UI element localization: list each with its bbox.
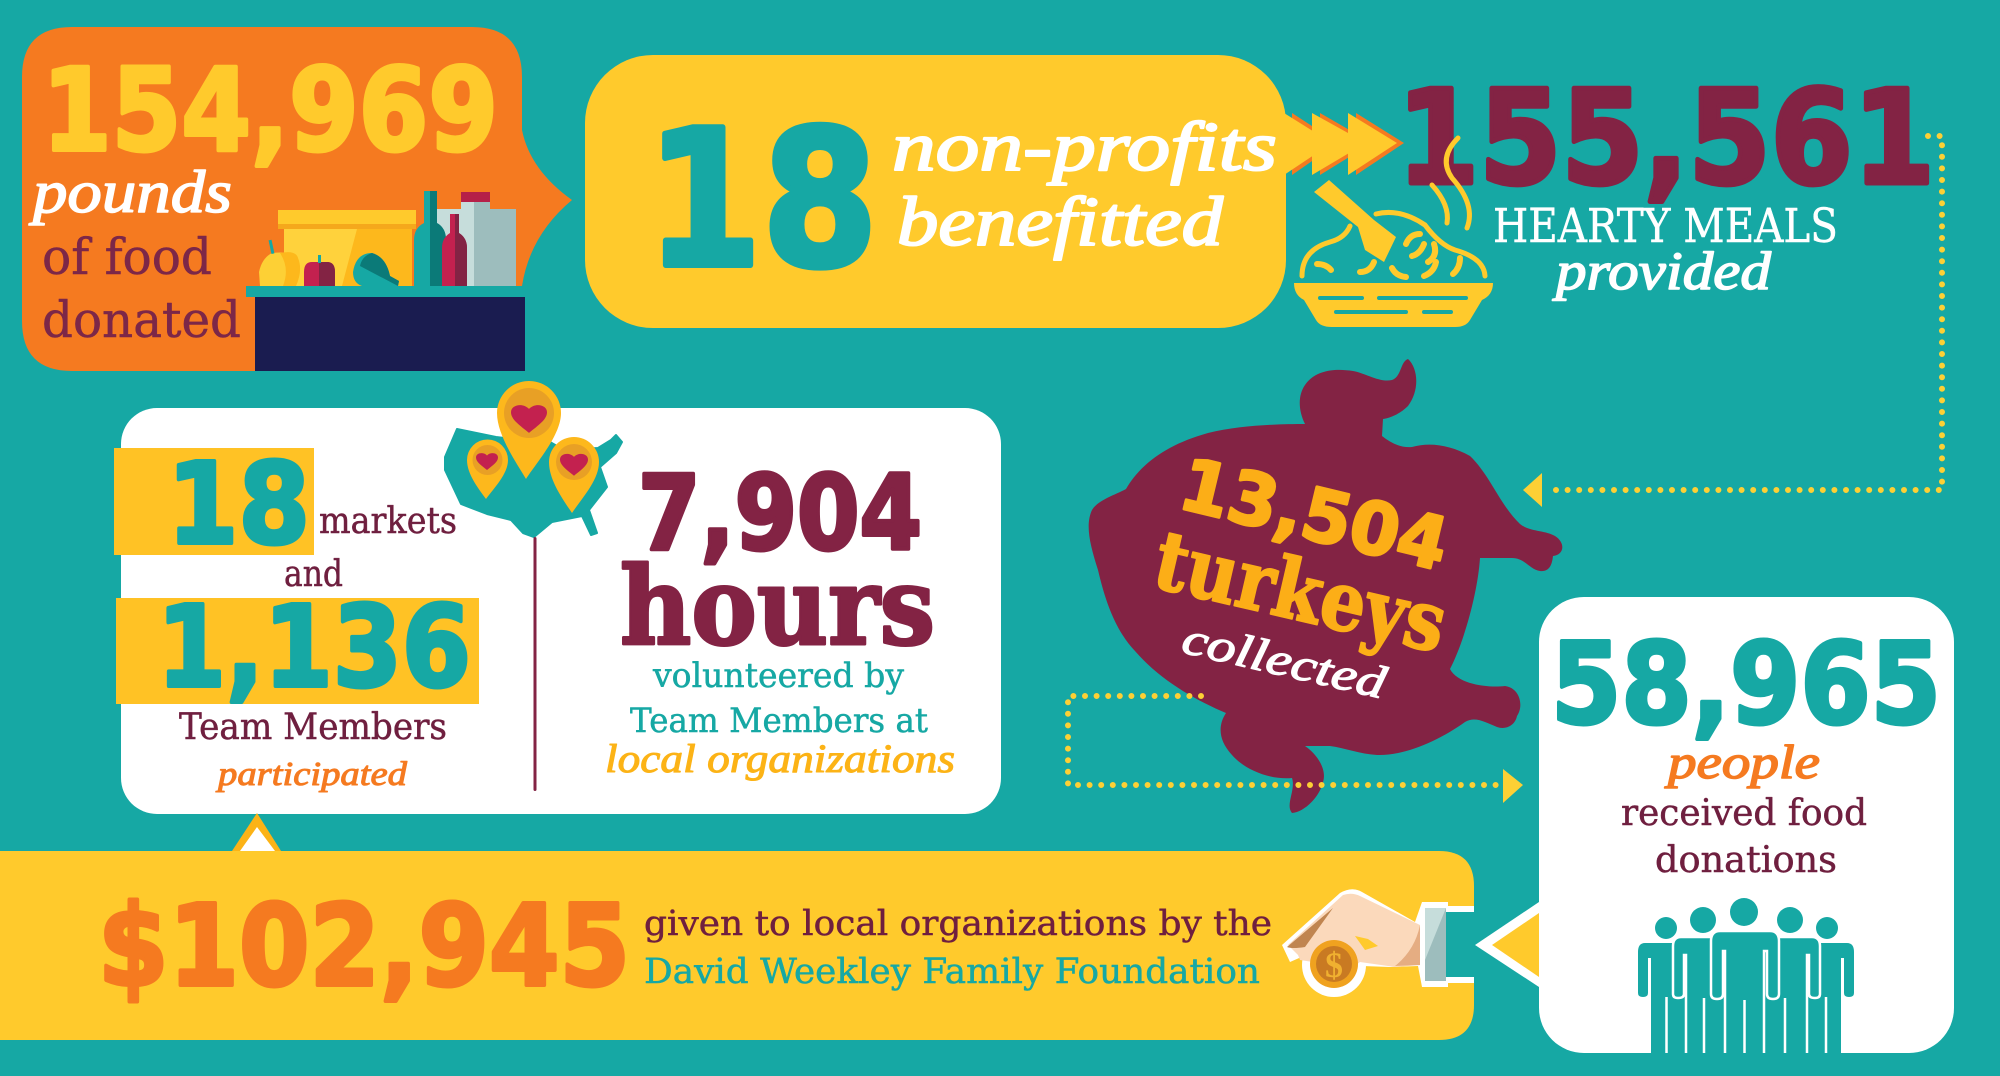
text: volunteered by: volunteered by [652, 656, 905, 696]
arrow: dotted path from turkeys to people [1068, 696, 1523, 803]
highlight: 18 markets: 18 [167, 440, 310, 570]
text: donated: donated [42, 291, 241, 349]
script: participated: participated [216, 756, 408, 793]
script: benefitted: benefitted [897, 184, 1224, 261]
panel: people fed [1475, 597, 1954, 1060]
script: non-profits: non-profits [892, 109, 1277, 186]
icon: groceries on a table [246, 191, 532, 371]
text: team members: Team Members [179, 707, 447, 748]
panel: non-profits benefitted [585, 55, 1286, 328]
icon: turkey silhouette [1089, 359, 1562, 813]
panel: volunteers [114, 381, 1001, 814]
icon: group of people [1638, 898, 1854, 1060]
text: foundation name: David Weekley Family Foundation [644, 952, 1260, 992]
text: and: and [284, 554, 343, 595]
highlight: 1,136 team members: 1,136 [157, 583, 471, 713]
stat: turkeys: turkeys [1146, 512, 1456, 672]
script: collected: collected [1178, 612, 1392, 709]
text: donations: donations [1655, 840, 1837, 881]
stat: $102,945: $102,945 [98, 882, 630, 1012]
stat: 155,561: 155,561 [1397, 62, 1935, 214]
text: received food: received food [1621, 793, 1867, 834]
icon: USA map with pins [445, 381, 622, 537]
script: pounds: pounds [28, 159, 232, 225]
arrow: pointer to donation banner [1475, 902, 1539, 987]
panel: donation banner [0, 813, 1474, 1040]
icon: casserole dish [1294, 138, 1493, 327]
text: hearty meals: HEARTY MEALS [1493, 199, 1838, 254]
stat: 154,969: 154,969 [42, 44, 498, 177]
script: people: people [1664, 736, 1820, 789]
text: team members at: Team Members at [630, 701, 928, 741]
text: markets: markets [319, 501, 457, 542]
icon: hand dropping a coin: $ [1325, 945, 1343, 985]
text: of food: of food [42, 228, 212, 286]
script: local organizations: local organizations [605, 736, 955, 781]
group: hearty meals [1294, 62, 1935, 327]
stat: 58,965: 58,965 [1551, 620, 1941, 750]
arrow: pointer up to volunteers [232, 813, 281, 851]
stat: hours: hours [620, 544, 935, 670]
stat: 13,504: 13,504 [1172, 442, 1456, 587]
icon: hand dropping a coin [1282, 889, 1474, 997]
panel: food donated [22, 27, 572, 371]
stat: 18: 18 [646, 90, 878, 310]
arrow: chevrons to meals [1284, 113, 1404, 175]
stat: 7,904: 7,904 [638, 454, 922, 574]
script: provided: provided [1551, 241, 1772, 301]
arrow: dotted path from meals to turkeys [1523, 136, 1942, 507]
text: given to local organizations: given to local organizations by the [644, 904, 1272, 944]
